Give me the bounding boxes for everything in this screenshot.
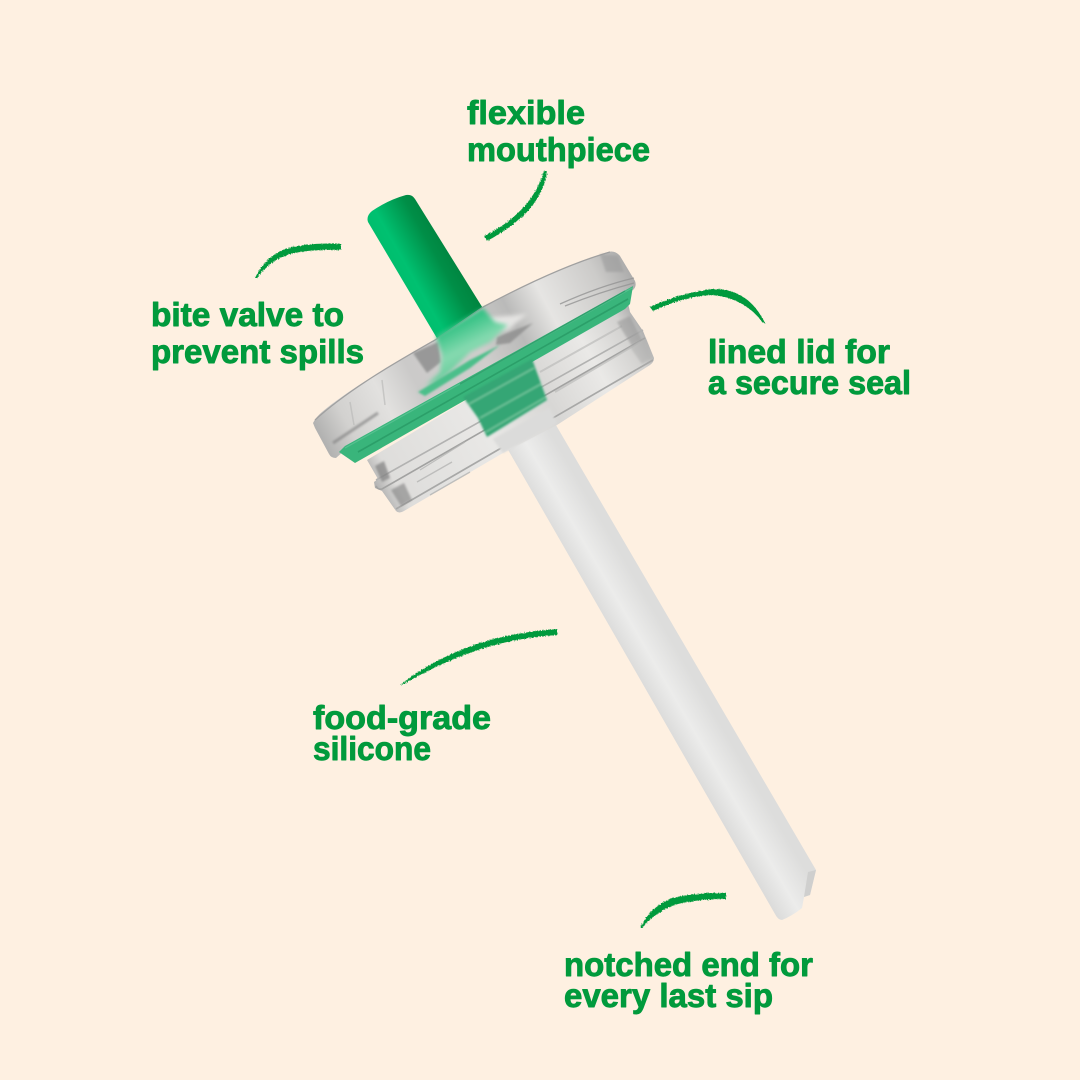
label text	[467, 94, 650, 168]
callout: flexible mouthpiece	[467, 94, 650, 241]
label text: notched end for	[564, 946, 813, 983]
label text	[151, 296, 364, 370]
lid top rim	[313, 252, 636, 458]
lid lower collar	[367, 303, 654, 512]
brush stroke	[400, 629, 557, 685]
clear silicone straw	[503, 420, 816, 920]
label text: flexible	[467, 94, 585, 131]
green silicone seal band	[339, 286, 633, 463]
callout: notched end	[564, 893, 813, 1014]
label text: a secure seal	[708, 364, 911, 401]
product: straw lid	[313, 195, 816, 920]
brush stroke	[255, 244, 341, 278]
brush stroke	[650, 289, 765, 323]
green mouthpiece	[368, 195, 484, 340]
label text: bite valve to	[151, 296, 344, 333]
label text	[708, 333, 911, 401]
clear straw join under lid	[493, 408, 557, 453]
callout: food-grade silicone	[313, 629, 557, 767]
callout: lined lid	[650, 289, 911, 401]
label text: prevent spills	[151, 333, 364, 370]
callout: bite valve	[151, 244, 364, 370]
label text	[313, 699, 491, 767]
label text	[564, 946, 813, 1014]
label text: lined lid for	[708, 333, 890, 370]
brush stroke	[484, 171, 547, 241]
green silicone collar behind lid	[463, 359, 547, 437]
brush stroke	[640, 893, 726, 928]
label text: food-grade	[313, 699, 491, 736]
green silicone neck through lid	[417, 308, 508, 394]
label text: silicone	[313, 730, 431, 767]
label text: every last sip	[564, 977, 773, 1014]
label text: mouthpiece	[467, 131, 650, 168]
